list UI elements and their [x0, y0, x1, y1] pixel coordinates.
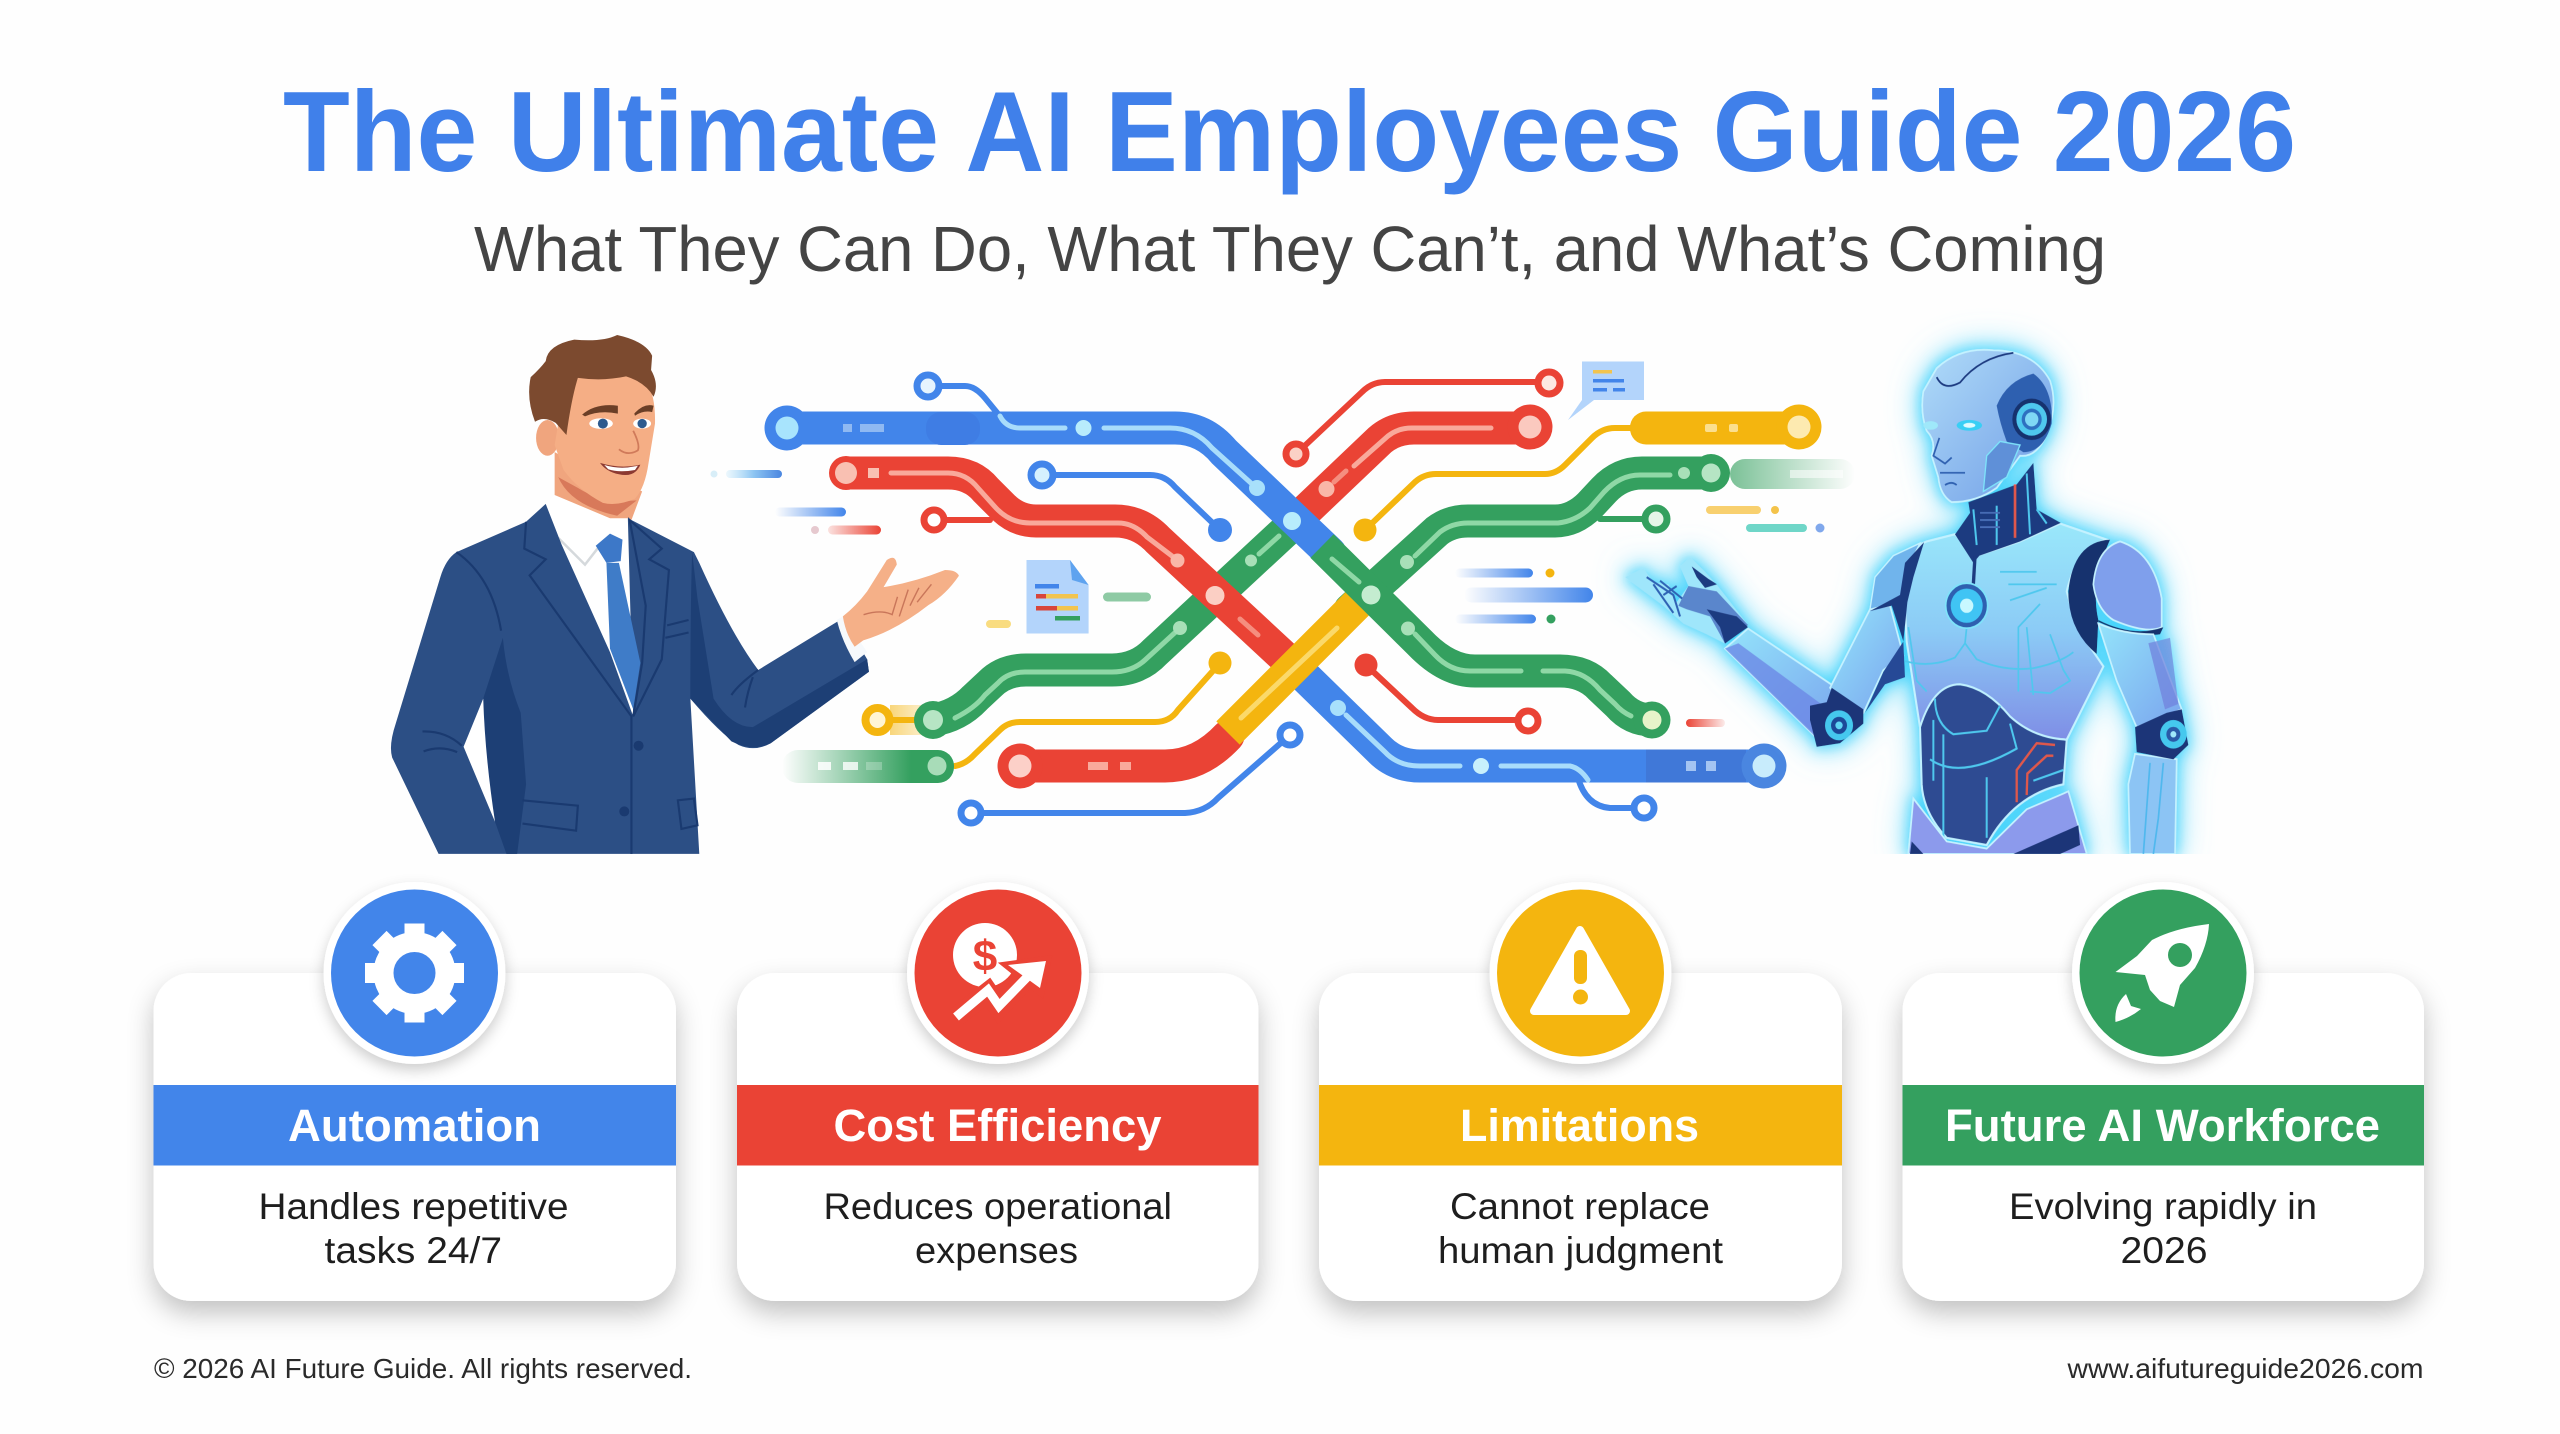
jacket shading	[483, 638, 526, 854]
tube: blue to green diagonal	[764, 406, 1670, 738]
heading: Future AI Workforce: Future AI Workforce	[1945, 1100, 2380, 1151]
shirt	[554, 495, 630, 520]
text: Future AI Workforce description	[2009, 1186, 2317, 1271]
text: Cost Efficiency description: Reduces operational	[824, 1186, 1172, 1227]
ear	[536, 420, 559, 456]
text: Future AI Workforce description: 2026	[2120, 1230, 2208, 1271]
text: Automation description	[258, 1186, 568, 1271]
speed lines left	[710, 470, 1151, 628]
robot right upper arm	[2098, 624, 2182, 727]
panel: Automation card	[154, 882, 676, 1301]
icon: warning triangle	[1490, 882, 1672, 1064]
cuff	[837, 618, 864, 662]
jacket	[391, 504, 869, 854]
mouth	[600, 463, 640, 475]
header band: Automation	[154, 1085, 676, 1166]
heading: Automation: Automation	[288, 1100, 541, 1151]
robot neck	[1955, 463, 2061, 563]
robot abdomen	[1920, 684, 2067, 845]
eyes	[589, 418, 613, 429]
robot upper arm left	[1830, 606, 1903, 713]
panel: Limitations card	[1319, 882, 1842, 1301]
title: The Ultimate AI Employees Guide 2026	[283, 69, 2296, 196]
tube: red to blue diagonal	[829, 456, 1786, 788]
heading: Cost Efficiency: Cost Efficiency	[834, 1100, 1162, 1151]
robot hand	[1625, 557, 1748, 644]
gap between arm and torso	[464, 699, 495, 822]
robot head	[1922, 350, 2053, 502]
tube: green to red diagonal	[914, 404, 1552, 739]
tube: yellow diagonal	[1228, 593, 1368, 733]
robot hip	[1908, 791, 2087, 854]
panel: Future AI Workforce card	[1902, 882, 2424, 1301]
robot left shoulder	[1870, 543, 1920, 609]
text: Limitations description: human judgment	[1438, 1230, 1724, 1271]
footer: website: www.aifutureguide2026.com	[2066, 1353, 2424, 1384]
text: Limitations description	[1438, 1186, 1724, 1271]
text: Cost Efficiency description: expenses	[915, 1230, 1078, 1271]
figure: businessman	[391, 335, 959, 854]
hair	[529, 335, 656, 435]
tie	[596, 534, 622, 563]
right lapel	[630, 520, 669, 716]
robot forearm	[1725, 629, 1840, 738]
icon: speech bubble	[1568, 362, 1644, 420]
small yellow connector left	[862, 704, 922, 736]
neck	[555, 452, 642, 520]
robot elbow	[1810, 688, 1863, 747]
tube: yellow right	[1630, 404, 1822, 450]
robot right elbow	[2135, 709, 2188, 759]
thin connector lines	[917, 372, 1667, 823]
robot torso	[1903, 524, 2107, 740]
speed lines right	[1455, 459, 1855, 727]
tube: red to yellow to green diagonal	[998, 454, 1730, 788]
figure: AI robot	[1625, 350, 2188, 854]
nose	[619, 431, 639, 453]
header band: Limitations	[1319, 1085, 1842, 1166]
heading: Limitations: Limitations	[1460, 1100, 1699, 1151]
robot chest core	[1946, 583, 1988, 628]
text: Automation description: tasks 24/7	[324, 1230, 502, 1271]
robot right shoulder	[2068, 540, 2110, 654]
illustration: human to AI network	[391, 335, 2188, 854]
icon: rocket	[2072, 882, 2254, 1064]
header band: Future AI Workforce	[1902, 1085, 2424, 1166]
robot right forearm	[2128, 754, 2177, 854]
panel: Cost Efficiency card	[737, 882, 1258, 1301]
icon: document	[1026, 560, 1089, 634]
robot chest circuits	[1905, 572, 2073, 695]
text: Future AI Workforce description: Evolving rapidly in	[2009, 1186, 2317, 1227]
jacket seams	[422, 522, 758, 854]
face	[555, 376, 656, 504]
icon: dollar coin with rising arrow: $	[973, 932, 997, 981]
hand	[843, 558, 959, 647]
text: Cost Efficiency description	[824, 1186, 1172, 1271]
icon: dollar coin with rising arrow	[907, 882, 1089, 1064]
text: Limitations description: Cannot replace	[1450, 1186, 1710, 1227]
header band: Cost Efficiency	[737, 1085, 1258, 1166]
footer: copyright: © 2026 AI Future Guide. All rights reserved.	[154, 1353, 692, 1384]
text: Automation description: Handles repetitive	[258, 1186, 568, 1227]
eyebrows	[582, 405, 654, 416]
faded green tube left	[782, 750, 954, 783]
icon: gear	[324, 882, 506, 1064]
subtitle: What They Can Do, What They Can’t, and What’s Coming	[474, 213, 2106, 285]
